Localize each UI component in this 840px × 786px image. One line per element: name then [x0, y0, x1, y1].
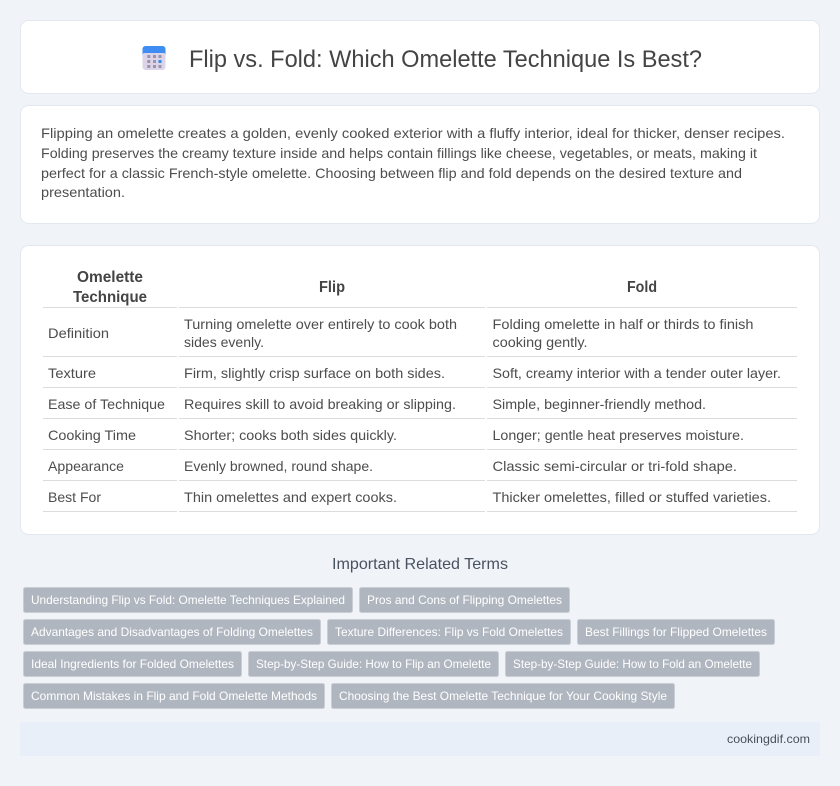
related term tags: Best Fillings for Flipped Omelettes: [585, 625, 767, 639]
header panel: [20, 20, 820, 94]
table header: [73, 269, 657, 306]
row: appearance: Evenly browned, round shape.: [184, 458, 373, 474]
panel: introduction: [20, 106, 820, 224]
related term tags: Texture Differences: Flip vs Fold Omelettes: [335, 625, 563, 639]
row: cooking time: Shorter; cooks both sides quickly.: [184, 427, 397, 443]
table header: Flip: [319, 279, 345, 296]
row: cooking time: Cooking Time: [48, 427, 136, 443]
related term tags: Ideal Ingredients for Folded Omelettes: [31, 657, 234, 671]
intro text: [41, 125, 785, 200]
related term tags: Common Mistakes in Flip and Fold Omelette Methods: [31, 689, 317, 703]
row: definition: sides evenly.: [184, 334, 264, 350]
related term tags: Step-by-Step Guide: How to Fold an Omelette: [513, 657, 752, 671]
row: texture: Firm, slightly crisp surface on both sides.: [184, 365, 445, 381]
row: definition: [48, 316, 754, 350]
row: ease of technique: [48, 396, 706, 412]
row: cooking time: Longer; gentle heat preserves moisture.: [492, 427, 744, 443]
row: appearance: Appearance: [48, 458, 124, 474]
related term tags: Pros and Cons of Flipping Omelettes: [367, 593, 562, 607]
related term tags: Choosing the Best Omelette Technique for Your Cooking Style: [339, 689, 667, 703]
row: appearance: Classic semi-circular or tri-fold shape.: [492, 458, 737, 474]
row: best for: Thin omelettes and expert cooks.: [184, 489, 397, 505]
related term tags: Understanding Flip vs Fold: Omelette Techniques Explained: [31, 593, 345, 607]
intro text: Flipping an omelette creates a golden, evenly cooked exterior with a fluffy interior, ideal for thicker, denser recipes.: [41, 125, 785, 141]
row: cooking time: [48, 427, 744, 443]
row: best for: Thicker omelettes, filled or stuffed varieties.: [492, 489, 771, 505]
row: best for: [48, 489, 771, 505]
row: texture: Texture: [48, 365, 96, 381]
panel: comparison table: [20, 246, 820, 534]
intro text: perfect for a classic French-style omelette. Choosing between flip and fold depends on the desired texture and: [41, 165, 742, 181]
related term tags: Advantages and Disadvantages of Folding Omelettes: [31, 625, 313, 639]
heading: important related terms: Important Related Terms: [332, 556, 508, 573]
icon: calendar: [142, 46, 166, 70]
row: ease of technique: Ease of Technique: [48, 396, 165, 412]
footer bar: [20, 722, 820, 756]
table header: Fold: [627, 279, 657, 296]
row: appearance: [48, 458, 737, 474]
intro text: Folding preserves the creamy texture inside and helps contain fillings like cheese, vegetables, or meats, making it: [41, 145, 757, 161]
row: best for: Best For: [48, 489, 101, 505]
row: definition: Folding omelette in half or thirds to finish: [492, 316, 754, 332]
row: texture: Soft, creamy interior with a tender outer layer.: [492, 365, 781, 381]
row: ease of technique: Simple, beginner-friendly method.: [492, 396, 706, 412]
table header: Omelette: [77, 269, 143, 286]
table header: Technique: [73, 289, 147, 306]
related term tags: [24, 588, 774, 708]
intro text: presentation.: [41, 184, 125, 200]
row: ease of technique: Requires skill to avoid breaking or slipping.: [184, 396, 456, 412]
footer source: cookingdif.com: [727, 732, 810, 746]
row: definition: Definition: [48, 325, 109, 341]
title: Flip vs. Fold: Which Omelette Technique Is Best?: [189, 46, 702, 73]
row: definition: cooking gently.: [492, 334, 588, 350]
row: texture: [48, 365, 781, 381]
related term tags: Step-by-Step Guide: How to Flip an Omelette: [256, 657, 491, 671]
row: definition: Turning omelette over entirely to cook both: [184, 316, 457, 332]
